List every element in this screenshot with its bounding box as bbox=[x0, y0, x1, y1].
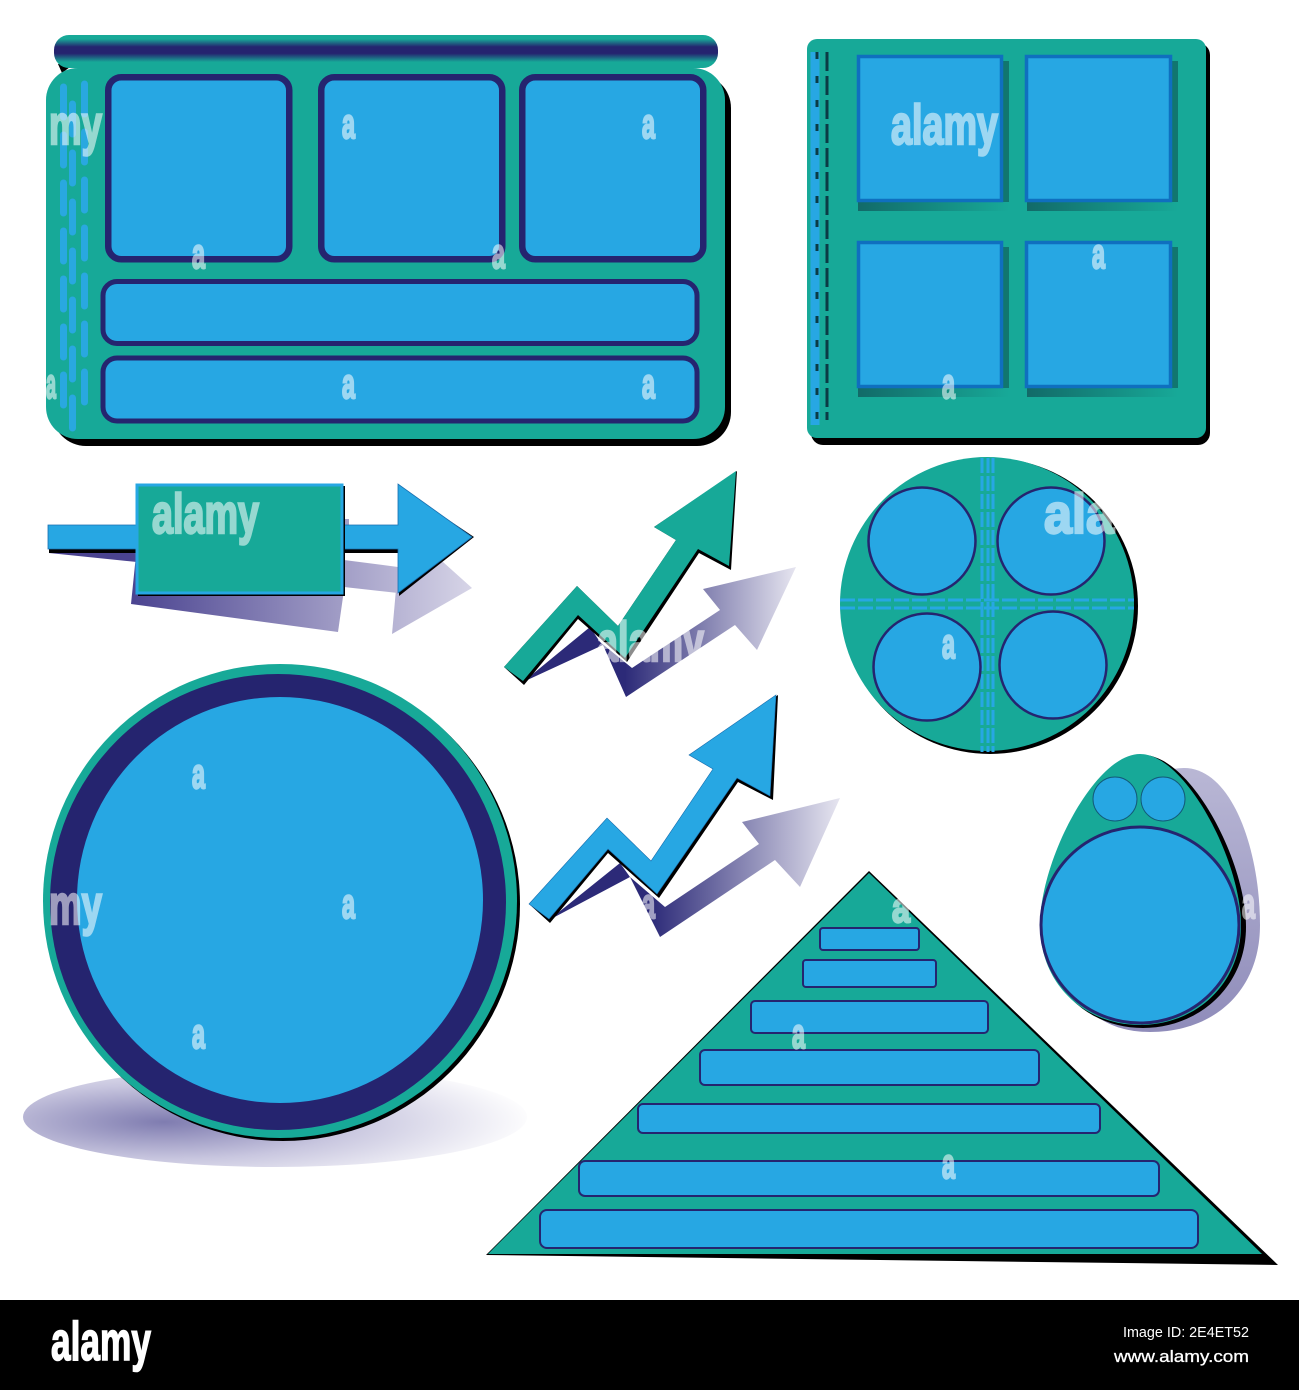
arrow cast shadow bbox=[49, 519, 472, 634]
watermarks: a bbox=[492, 230, 505, 277]
image id: Image ID: 2E4ET52 bbox=[1123, 1324, 1249, 1341]
tier 5 bbox=[638, 1104, 1100, 1133]
stitching dashes bbox=[64, 84, 84, 430]
footer strip bbox=[0, 1300, 1299, 1390]
tier 3 bbox=[751, 1001, 988, 1033]
blue face bbox=[77, 697, 483, 1103]
panel: large ring circle bbox=[23, 664, 527, 1167]
circle 3 bbox=[874, 614, 980, 720]
watermarks: a bbox=[642, 100, 655, 147]
shadow bbox=[523, 567, 796, 697]
watermarks: a bbox=[46, 360, 56, 407]
box 2 bbox=[321, 77, 502, 259]
navy ring bbox=[50, 674, 506, 1130]
website: www.alamy.com bbox=[1113, 1347, 1249, 1366]
watermarks: my bbox=[49, 873, 102, 936]
shadow bbox=[549, 798, 840, 937]
binding stitches bbox=[815, 52, 827, 430]
watermarks: a bbox=[342, 100, 355, 147]
watermarks: a bbox=[942, 360, 955, 407]
watermarks: a bbox=[642, 880, 655, 927]
watermarks: a bbox=[342, 880, 355, 927]
watermarks: a bbox=[892, 884, 910, 931]
watermarks: a bbox=[1242, 880, 1255, 927]
black edge bbox=[504, 471, 737, 685]
stitched cross bbox=[840, 458, 1134, 752]
tile 3 bbox=[858, 242, 1002, 386]
watermarks: a bbox=[642, 360, 655, 407]
circle 1 bbox=[868, 488, 976, 594]
panel: pyramid with seven tiers bbox=[486, 871, 1278, 1265]
panel: wide card with three boxes and two bars bbox=[46, 35, 731, 446]
box 1 bbox=[108, 77, 289, 259]
tile 4 bbox=[1026, 242, 1170, 386]
ground shadow bbox=[23, 1067, 527, 1167]
watermarks: ala bbox=[1044, 482, 1115, 545]
watermarks: alamy bbox=[597, 610, 704, 673]
watermarks: a bbox=[942, 620, 955, 667]
zigzag arrow: blue bbox=[529, 695, 840, 937]
tile 1 bbox=[858, 56, 1002, 200]
label box bbox=[138, 486, 345, 596]
watermarks: a bbox=[1092, 230, 1105, 277]
small circle right bbox=[1141, 777, 1185, 821]
watermarks: a bbox=[192, 230, 205, 277]
small circle left bbox=[1093, 777, 1137, 821]
watermarks: a bbox=[192, 750, 205, 797]
watermarks: alamy bbox=[152, 482, 259, 545]
bar 2 bbox=[103, 358, 697, 421]
arrow with rectangular label box bbox=[48, 484, 474, 634]
tile 2 bbox=[1026, 56, 1170, 200]
arrow body bbox=[529, 695, 776, 919]
tier 4 bbox=[700, 1050, 1039, 1085]
watermarks bbox=[46, 93, 1255, 1187]
circle 4 bbox=[1000, 612, 1106, 718]
panel: circle with four small circles bbox=[840, 457, 1138, 754]
watermarks: a bbox=[942, 1140, 955, 1187]
tier 7 bbox=[540, 1210, 1198, 1248]
top rolled bar bbox=[54, 35, 718, 68]
panel: egg shape with circles bbox=[1040, 754, 1260, 1032]
big circle bbox=[1041, 827, 1239, 1023]
zigzag arrow: teal bbox=[504, 471, 796, 697]
watermarks: a bbox=[342, 360, 355, 407]
bar 1 bbox=[103, 282, 697, 344]
black edge bbox=[529, 695, 778, 923]
tier 1 bbox=[820, 928, 919, 950]
tier 2 bbox=[803, 960, 936, 987]
arrow body bbox=[504, 471, 736, 681]
box 3 bbox=[522, 77, 703, 259]
arrow shaft and head bbox=[49, 486, 474, 596]
watermarks: a bbox=[192, 1010, 205, 1057]
panel: square card with four tiles bbox=[807, 39, 1210, 445]
watermarks: alamy bbox=[891, 93, 998, 156]
tile shadows bbox=[858, 61, 1178, 397]
circle 2 bbox=[998, 488, 1104, 594]
tier 6 bbox=[579, 1161, 1159, 1196]
watermarks: a bbox=[792, 1010, 805, 1057]
footer logo: alamy bbox=[51, 1310, 151, 1372]
watermarks: my bbox=[49, 93, 102, 156]
